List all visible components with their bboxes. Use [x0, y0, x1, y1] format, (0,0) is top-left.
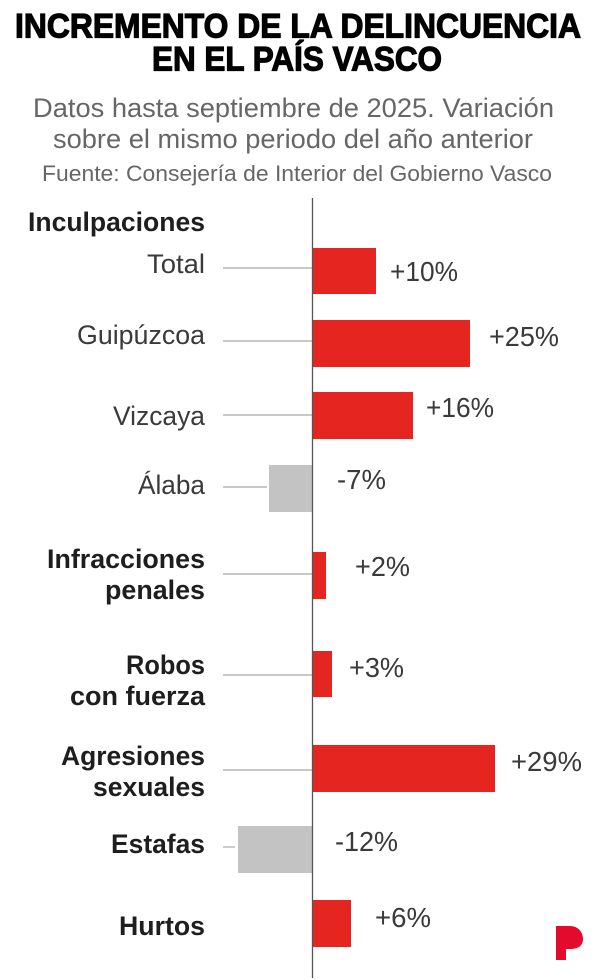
value: Total: +10%	[390, 256, 458, 287]
label: Total: Total	[147, 249, 205, 279]
bar: Estafas	[238, 826, 313, 873]
bar: Álaba	[269, 465, 313, 512]
value: Álaba: -7%	[337, 464, 386, 495]
bar: Robos con fuerza	[313, 651, 332, 697]
bar chart	[238, 248, 495, 947]
value: Infracciones penales: +2%	[355, 551, 410, 582]
value: Robos con fuerza: +3%	[349, 652, 404, 683]
subtitle: Datos hasta septiembre de 2025. Variación	[33, 93, 554, 123]
source: Fuente: Consejería de Interior del Gobierno Vasco	[42, 161, 552, 186]
heading: Inculpaciones: Inculpaciones	[28, 207, 205, 237]
label: Hurtos: Hurtos	[119, 911, 205, 941]
label: Infracciones penales: penales	[105, 575, 205, 605]
label: Agresiones sexuales	[61, 741, 205, 802]
axis line	[312, 198, 314, 978]
icon: publisher logo P	[556, 926, 583, 960]
bar: Hurtos	[313, 900, 351, 947]
label: Agresiones sexuales: sexuales	[93, 772, 205, 802]
label: Robos con fuerza: Robos	[126, 650, 205, 680]
value: Estafas: -12%	[335, 826, 398, 857]
label: Infracciones penales: Infracciones	[47, 544, 205, 574]
bar: Infracciones penales	[313, 552, 326, 599]
title: EN EL PAÍS VASCO	[152, 38, 442, 78]
label: Vizcaya: Vizcaya	[113, 401, 205, 431]
label: Estafas: Estafas	[111, 829, 205, 859]
label: Infracciones penales	[47, 544, 205, 605]
label: Robos con fuerza	[70, 650, 206, 711]
title	[15, 8, 581, 78]
label: Guipúzcoa: Guipúzcoa	[77, 320, 205, 350]
label: Agresiones sexuales: Agresiones	[61, 741, 205, 771]
bar: Total	[313, 248, 376, 294]
value: Agresiones sexuales: +29%	[511, 746, 582, 777]
connector lines	[223, 268, 312, 847]
label: Álaba: Álaba	[138, 470, 205, 500]
value: Guipúzcoa: +25%	[489, 321, 559, 352]
subtitle: sobre el mismo periodo del año anterior	[53, 124, 533, 154]
bar: Agresiones sexuales	[313, 745, 495, 792]
subtitle	[33, 93, 554, 154]
value: Hurtos: +6%	[375, 902, 431, 933]
label: Robos con fuerza: con fuerza	[70, 681, 206, 711]
value: Vizcaya: +16%	[426, 392, 494, 423]
bar: Vizcaya	[313, 392, 413, 439]
bar: Guipúzcoa	[313, 320, 470, 367]
